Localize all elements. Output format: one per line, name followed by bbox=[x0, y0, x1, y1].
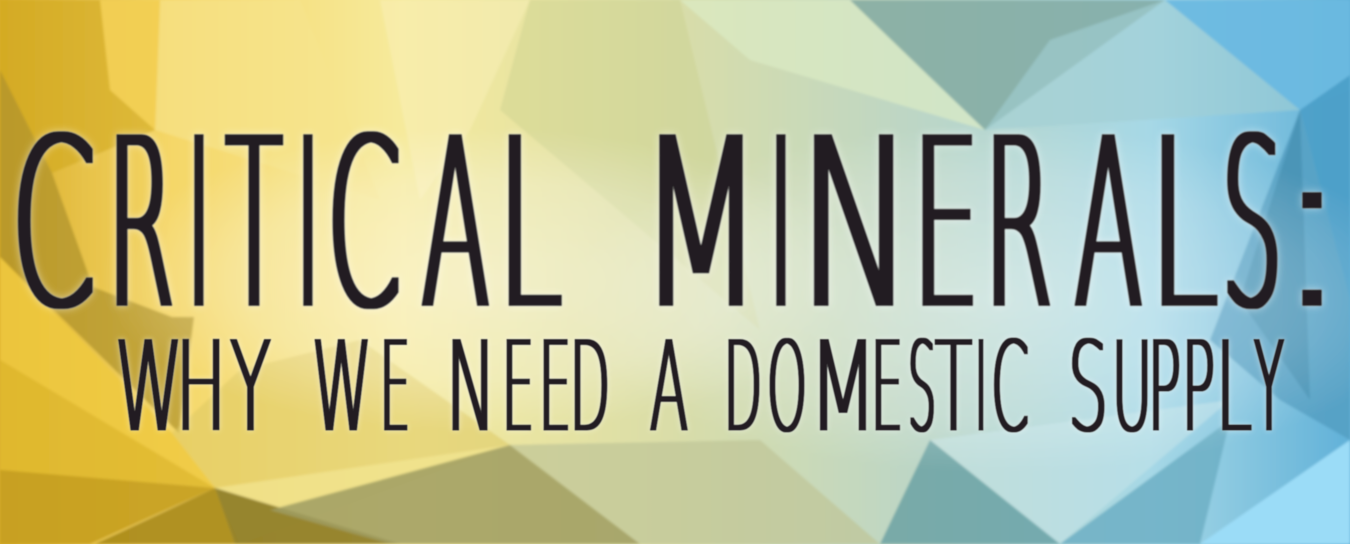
title: Critical Minerals: L bbox=[498, 89, 562, 360]
subtitle: Why we need a domestic supply: O bbox=[767, 316, 807, 460]
title: Critical Minerals: R bbox=[108, 89, 174, 360]
title: Critical Minerals: I bbox=[299, 89, 317, 360]
subtitle: Why we need a domestic supply: W bbox=[312, 316, 372, 460]
subtitle: Why we need a domestic supply: E bbox=[380, 316, 410, 460]
subtitle: Why we need a domestic supply: I bbox=[976, 316, 986, 460]
subtitle: Why we need a domestic supply: C bbox=[991, 316, 1029, 460]
subtitle: Why we need a domestic supply: A bbox=[650, 316, 688, 460]
subtitle: Why we need a domestic supply: L bbox=[1216, 316, 1252, 460]
title: Critical Minerals: E bbox=[913, 89, 979, 360]
title: Critical Minerals: A bbox=[422, 89, 489, 360]
subtitle: Why we need a domestic supply: D bbox=[570, 316, 610, 460]
title: Critical Minerals: C bbox=[327, 89, 401, 360]
subtitle: Why we need a domestic supply: S bbox=[1068, 316, 1108, 460]
title: Critical Minerals: T bbox=[226, 89, 282, 360]
subtitle: Why we need a domestic supply: S bbox=[908, 316, 936, 460]
title: Critical Minerals: I bbox=[190, 89, 208, 360]
banner graphic: Y bbox=[1254, 316, 1284, 460]
subtitle: Why we need a domestic supply: E bbox=[539, 316, 571, 460]
subtitle: Why we need a domestic supply: N bbox=[446, 316, 496, 460]
subtitle: Why we need a domestic supply: H bbox=[176, 316, 226, 460]
subtitle: Why we need a domestic supply: D bbox=[724, 316, 762, 460]
subtitle: Why we need a domestic supply: U bbox=[1112, 316, 1152, 460]
title: Critical Minerals: A bbox=[1075, 89, 1142, 360]
subtitle: Why we need a domestic supply: Y bbox=[230, 316, 271, 460]
title: Critical Minerals: R bbox=[985, 89, 1052, 360]
subtitle: Why we need a domestic supply: P bbox=[1182, 316, 1215, 460]
subtitle: Why we need a domestic supply: E bbox=[502, 316, 534, 460]
subtitle: Why we need a domestic supply: P bbox=[1148, 316, 1181, 460]
title: Critical Minerals: L bbox=[1150, 89, 1218, 360]
title: Critical Minerals: : bbox=[1272, 89, 1350, 360]
title: Critical Minerals: N bbox=[799, 89, 913, 360]
title: Critical Minerals: M bbox=[640, 89, 762, 360]
subtitle: Why we need a domestic supply: E bbox=[871, 316, 903, 460]
title: Critical Minerals: C bbox=[11, 89, 96, 360]
subtitle: Why we need a domestic supply: W bbox=[115, 316, 183, 460]
subtitle: Why we need a domestic supply: T bbox=[935, 316, 972, 460]
subtitle: Why we need a domestic supply: M bbox=[809, 316, 877, 460]
title: Critical Minerals: I bbox=[772, 89, 790, 360]
